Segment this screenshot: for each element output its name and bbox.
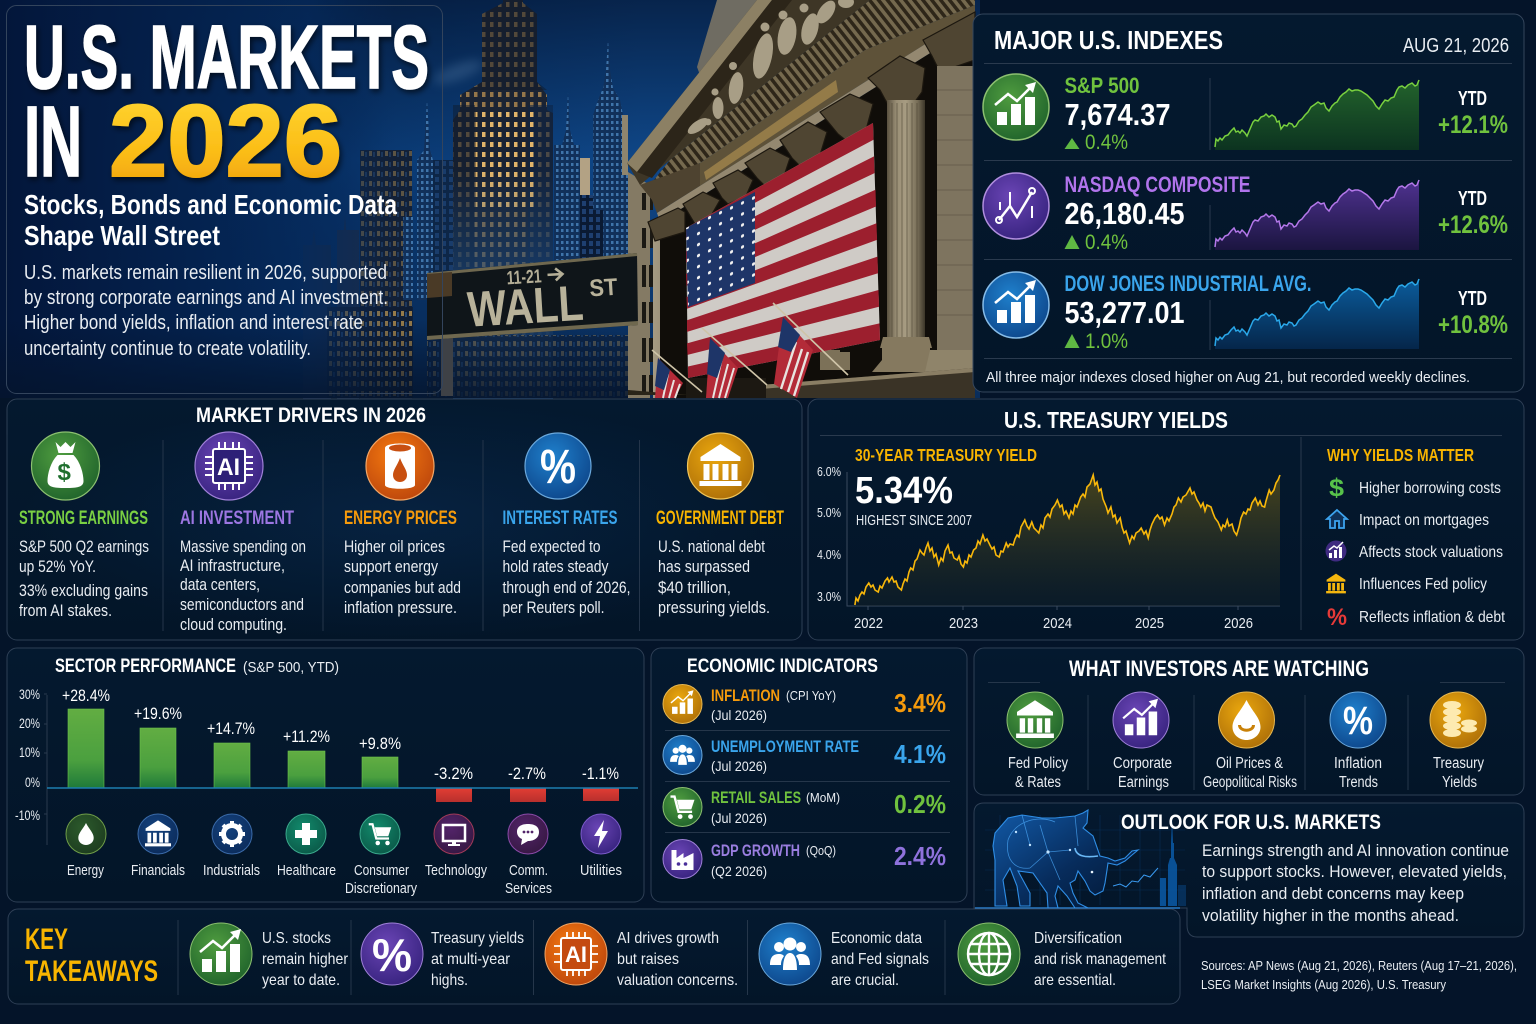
takeaway: treasury yields: at multi-year: [431, 951, 511, 968]
heading: (S&P 500, YTD): [243, 659, 339, 676]
takeaway: diversification: [958, 923, 1166, 989]
takeaway: AI growth: valuation concerns.: [617, 972, 738, 989]
takeaway: economic data: are crucial.: [831, 972, 899, 989]
indicator: unemployment rate: [663, 736, 946, 774]
icon: oil barrel: [366, 432, 434, 500]
heading: SECTOR PERFORMANCE: [55, 656, 236, 677]
icon: AI chip: [545, 923, 607, 985]
bar chart: sector returns: -1.1%: [582, 764, 619, 783]
watch item: inflation trends: Inflation: [1334, 755, 1382, 772]
sources note: LSEG Market Insights (Aug 2026), U.S. Treasury: [1201, 977, 1446, 992]
sector: healthcare: Healthcare: [277, 862, 336, 879]
sector: financials: Financials: [131, 862, 185, 879]
row: Dow Jones: +10.8%: [1438, 311, 1508, 339]
sector: consumer discretionary: Consumer: [354, 862, 409, 879]
outlook paragraph: volatility higher in the months ahead.: [1202, 906, 1459, 925]
row: NASDAQ Composite: 26,180.45: [1064, 196, 1184, 231]
icon: speech bubble: [508, 814, 548, 854]
indicator: inflation: [663, 684, 946, 724]
panel: what investors are watching: [974, 648, 1524, 795]
icon: bank: [1326, 574, 1346, 593]
row: NASDAQ Composite: NASDAQ COMPOSITE: [1064, 172, 1250, 197]
driver: AI investment: semiconductors and: [180, 596, 304, 614]
sources note: [1201, 958, 1517, 992]
icon: coin stacks: [1430, 692, 1486, 748]
driver: energy prices: companies but add: [344, 579, 461, 597]
row: S&P 500: +12.1%: [1438, 111, 1508, 139]
bar chart: sector returns: +9.8%: [359, 734, 401, 753]
icon: dollar: $: [1329, 474, 1344, 502]
driver: government debt: [656, 433, 784, 617]
driver: energy prices: [344, 432, 461, 617]
takeaway: diversification: Diversification: [1034, 930, 1122, 947]
icon: bank: [1007, 692, 1063, 748]
sector: communication services: [505, 814, 552, 897]
driver: AI investment: AI infrastructure,: [180, 557, 285, 575]
outlook paragraph: Earnings strength and AI innovation continue: [1202, 841, 1509, 860]
title: U.S. MARKETS: [24, 8, 429, 108]
bar chart: sector returns: +11.2%: [283, 727, 330, 746]
indicator: retail sales: [663, 788, 946, 826]
icon: percent: %: [1343, 699, 1373, 743]
exchange building facade: [627, 0, 975, 398]
takeaway: diversification: are essential.: [1034, 972, 1116, 989]
driver: strong earnings: up 52% YoY.: [19, 558, 96, 576]
bar chart: sector returns: 30%: [19, 687, 40, 702]
indicator: retail sales: 0.2%: [894, 789, 946, 819]
small flags: [655, 317, 813, 398]
sector: industrials: [203, 814, 260, 879]
watch item: treasury yields: Treasury: [1433, 755, 1484, 772]
icon: government building: [688, 433, 754, 499]
driver: interest rates: through end of 2026,: [502, 579, 630, 597]
heading: MAJOR U.S. INDEXES: [994, 25, 1223, 55]
watch item: oil prices: Geopolitical Risks: [1203, 774, 1297, 791]
heading: OUTLOOK FOR U.S. MARKETS: [1121, 811, 1381, 834]
icon: percent: %: [1327, 604, 1347, 631]
driver: government debt: U.S. national debt: [658, 538, 765, 556]
driver: government debt: pressuring yields.: [658, 599, 770, 617]
icon: energy drop: [66, 814, 106, 854]
sparkline: NASDAQ: [1215, 180, 1419, 250]
outlook paragraph: [1202, 841, 1509, 925]
sector: financials: [131, 814, 185, 879]
chart: 30-year yield: 30-YEAR TREASURY YIELD: [855, 445, 1037, 465]
list: why yields matter: Affects stock valuations: [1359, 544, 1503, 561]
row: S&P 500: 7,674.37: [1064, 97, 1170, 132]
heading: ECONOMIC INDICATORS: [687, 655, 878, 677]
bar chart: sector returns: 20%: [19, 716, 40, 731]
driver: interest rates: hold rates steady: [502, 558, 609, 576]
indicator: GDP growth: (QoQ): [806, 843, 836, 858]
watch item: corporate earnings: [1113, 692, 1172, 791]
title: 2026: [109, 84, 342, 198]
watch item: corporate earnings: Corporate: [1113, 755, 1172, 772]
driver: strong earnings: STRONG EARNINGS: [19, 508, 148, 529]
chart: 30-year yield: 5.0%: [817, 505, 841, 520]
watch item: oil prices: [1203, 692, 1297, 791]
chart: 30-year yield: 3.0%: [817, 589, 841, 604]
icon: AI chip: [195, 432, 263, 500]
list: why yields matter: Higher borrowing costs: [1359, 480, 1501, 497]
chart: 30-year yield: 2024: [1043, 615, 1072, 632]
indicator: GDP growth: GDP GROWTH: [711, 842, 800, 860]
panel: key takeaways: [8, 909, 1180, 1004]
icon: rising chart: [1113, 692, 1169, 748]
row: S&P 500: 0.4%: [1085, 131, 1128, 154]
chart: 30-year yield: 2022: [854, 615, 883, 632]
intro paragraph: uncertainty continue to create volatility.: [24, 338, 311, 360]
bar chart: sector returns: [15, 686, 638, 845]
icon: gear: [212, 814, 252, 854]
Wall Street sign: [427, 253, 638, 396]
Wall Street sign: 11-21: [506, 266, 543, 289]
sector: communication services: Services: [505, 880, 552, 897]
list: why yields matter: Impact on mortgages: [1359, 512, 1489, 529]
icon: stock chart: [1326, 540, 1346, 562]
title: IN: [24, 86, 82, 198]
icon: bank: [138, 814, 178, 854]
row: Dow Jones: DOW JONES INDUSTRIAL AVG.: [1064, 271, 1312, 296]
driver: AI investment: cloud computing.: [180, 616, 287, 634]
indicator: unemployment rate: (Jul 2026): [711, 758, 767, 774]
intro paragraph: [24, 262, 388, 360]
driver: strong earnings: 33% excluding gains: [19, 582, 148, 600]
watch item: corporate earnings: Earnings: [1118, 774, 1169, 791]
sector: technology: Technology: [425, 862, 487, 879]
driver: AI investment: Massive spending on: [180, 538, 306, 556]
row: S&P 500: S&P 500: [1064, 73, 1140, 98]
driver: interest rates: Fed expected to: [502, 538, 600, 556]
driver: energy prices: inflation pressure.: [344, 599, 457, 617]
indicator: GDP growth: [663, 840, 946, 879]
takeaway: stocks higher: remain higher: [262, 951, 349, 968]
sector: consumer discretionary: [345, 814, 417, 897]
sector: utilities: [580, 814, 622, 879]
chart: 30-year yield: 4.0%: [817, 547, 841, 562]
row: NASDAQ Composite: 0.4%: [1085, 231, 1128, 254]
chart: 30-year yield: HIGHEST SINCE 2007: [856, 513, 972, 529]
icon: AI chip: AI: [565, 942, 587, 967]
subtitle: Stocks, Bonds and Economic Data: [24, 189, 397, 220]
intro paragraph: Higher bond yields, inflation and interest rate: [24, 312, 363, 334]
hero image: Wall Street skyline and exchange facade: [0, 0, 980, 400]
driver: government debt: $40 trillion,: [658, 579, 731, 597]
row: NASDAQ Composite: [983, 172, 1508, 254]
icon: people: [759, 923, 821, 985]
takeaway: treasury yields: [361, 923, 524, 989]
driver: interest rates: INTEREST RATES: [502, 508, 618, 529]
watch item: Fed policy: Fed Policy: [1008, 755, 1068, 772]
icon: Dow chart: [983, 272, 1049, 338]
icon: rising chart: [190, 923, 252, 985]
driver: AI investment: [180, 432, 306, 634]
column capitals: [648, 12, 975, 241]
Wall Street sign: ST: [589, 274, 619, 302]
sector: energy: Energy: [67, 862, 104, 879]
panel: economic indicators: [651, 648, 967, 902]
bar chart: sector returns: -10%: [15, 808, 40, 823]
outlook paragraph: inflation and debt concerns may keep: [1202, 884, 1464, 903]
bar chart: sector returns: +14.7%: [207, 719, 255, 738]
indicator: GDP growth: 2.4%: [894, 841, 946, 871]
bar chart: sector returns: -3.2%: [434, 764, 473, 783]
chart: 30-year yield: 2023: [949, 615, 978, 632]
driver: government debt: has surpassed: [658, 558, 750, 576]
driver: strong earnings: [19, 432, 149, 620]
panel: market drivers: [7, 399, 802, 640]
skyline: [0, 0, 632, 400]
takeaway: stocks higher: U.S. stocks: [262, 930, 331, 947]
row: Dow Jones: 1.0%: [1085, 330, 1128, 353]
illustration: glowing bull: [975, 810, 1186, 908]
row: Dow Jones: 53,277.01: [1064, 295, 1184, 330]
icon: medical cross: [286, 814, 326, 854]
takeaway: treasury yields: Treasury yields: [431, 930, 524, 947]
list: why yields matter: WHY YIELDS MATTER: [1327, 445, 1474, 465]
row: Dow Jones: [983, 271, 1508, 353]
driver: AI investment: data centers,: [180, 576, 260, 594]
heading: KEY: [25, 923, 68, 956]
heading: WHAT INVESTORS ARE WATCHING: [1069, 656, 1369, 681]
driver: government debt: GOVERNMENT DEBT: [656, 508, 784, 529]
watch item: treasury yields: Yields: [1442, 774, 1477, 791]
takeaway: treasury yields: highs.: [431, 972, 468, 989]
icon: shopping cart: [360, 814, 400, 854]
sector: industrials: Industrials: [203, 862, 260, 879]
sector: utilities: Utilities: [580, 862, 622, 879]
watch item: treasury yields: [1430, 692, 1486, 791]
chart: 30-year yield: 5.34%: [855, 470, 953, 512]
indicator: inflation: 3.4%: [894, 688, 946, 718]
list: why yields matter: Reflects inflation & debt: [1359, 609, 1505, 626]
icon: oil drop: [1218, 692, 1274, 748]
sector: consumer discretionary: Discretionary: [345, 880, 417, 897]
driver: AI investment: AI INVESTMENT: [180, 508, 294, 529]
icon: percent: [525, 433, 591, 499]
icon: percent: %: [372, 929, 412, 981]
icon: lightning bolt: [581, 814, 621, 854]
icon: factory: [663, 840, 702, 878]
takeaway: economic data: [759, 923, 929, 989]
bar chart: sector returns: +19.6%: [134, 704, 182, 723]
panel: hero title block: [6, 6, 442, 394]
takeaway: economic data: Economic data: [831, 930, 922, 947]
panel: sector performance: [7, 648, 644, 902]
driver: energy prices: Higher oil prices: [344, 538, 445, 556]
indicator: GDP growth: (Q2 2026): [711, 863, 767, 879]
icon: AI chip: AI: [217, 454, 240, 481]
icon: money bag: $: [58, 459, 72, 486]
intro paragraph: U.S. markets remain resilient in 2026, supported: [24, 262, 387, 284]
icon: cart: [663, 788, 702, 826]
chart: 30-year yield: [817, 445, 1280, 632]
takeaway: stocks higher: year to date.: [262, 972, 340, 989]
heading: U.S. TREASURY YIELDS: [1004, 407, 1228, 433]
panel: outlook for U.S. markets: [974, 803, 1524, 937]
takeaway: AI growth: AI drives growth: [617, 930, 719, 947]
row: S&P 500: YTD: [1458, 88, 1487, 110]
sector: communication services: Comm.: [509, 862, 548, 879]
subtitle: Shape Wall Street: [24, 220, 220, 251]
icon: globe: [958, 923, 1020, 985]
Wall Street sign: WALL: [466, 275, 585, 338]
driver: strong earnings: S&P 500 Q2 earnings: [19, 538, 149, 556]
indicator: retail sales: (Jul 2026): [711, 810, 767, 826]
watch item: oil prices: Oil Prices &: [1216, 755, 1284, 772]
icon: rising chart: [663, 684, 702, 724]
indicator: retail sales: RETAIL SALES: [711, 789, 801, 807]
indicator: unemployment rate: UNEMPLOYMENT RATE: [711, 738, 859, 756]
driver: strong earnings: from AI stakes.: [19, 602, 112, 620]
list: why yields matter: [1326, 445, 1505, 631]
icon: monitor: [434, 814, 474, 854]
takeaway: AI growth: but raises: [617, 951, 679, 968]
bar chart: sector returns: +28.4%: [62, 686, 110, 705]
panel: major U.S. indexes: [973, 14, 1524, 392]
sparkline: S&P 500: [1215, 80, 1419, 150]
icon: house: [1327, 510, 1347, 528]
icon: percent: %: [540, 441, 576, 494]
columns: [887, 100, 925, 340]
indicator: inflation: (Jul 2026): [711, 707, 767, 723]
sector: technology: [425, 814, 487, 879]
heading: TAKEAWAYS: [25, 955, 158, 988]
takeaway: stocks higher: [190, 923, 349, 989]
takeaway: diversification: and risk management: [1034, 951, 1166, 968]
driver: energy prices: support energy: [344, 558, 439, 576]
sector: energy: [66, 814, 106, 879]
main American flag: [686, 123, 880, 378]
indicator: unemployment rate: 4.1%: [894, 739, 946, 769]
chart: 30-year yield: 2026: [1224, 615, 1253, 632]
chart: 30-year yield: 6.0%: [817, 464, 841, 479]
row: NASDAQ Composite: YTD: [1458, 188, 1487, 210]
driver: interest rates: [502, 433, 630, 617]
sparkline: Dow Jones: [1215, 279, 1419, 349]
list: why yields matter: Influences Fed policy: [1359, 576, 1487, 593]
driver: energy prices: ENERGY PRICES: [344, 508, 457, 529]
icon: money bag: [32, 432, 100, 500]
bar chart: sector returns: 10%: [19, 745, 40, 760]
heading: MARKET DRIVERS IN 2026: [196, 404, 426, 427]
indicator: inflation: INFLATION: [711, 687, 780, 705]
icon: S&P chart: [983, 74, 1049, 140]
takeaway: AI growth: [545, 923, 738, 989]
row: NASDAQ Composite: +12.6%: [1438, 211, 1508, 239]
bar chart: sector returns: 0%: [25, 775, 40, 790]
watch item: Fed policy: [1007, 692, 1068, 791]
icon: NASDAQ chart: [983, 173, 1049, 239]
subtitle: [24, 189, 397, 251]
watch item: Fed policy: & Rates: [1015, 774, 1061, 791]
indicator: inflation: (CPI YoY): [786, 688, 836, 703]
date: AUG 21, 2026: [1403, 35, 1509, 57]
panel: U.S. treasury yields: [808, 399, 1524, 640]
driver: interest rates: per Reuters poll.: [502, 599, 604, 617]
watch item: inflation trends: Trends: [1339, 774, 1378, 791]
heading: [25, 923, 158, 988]
intro paragraph: by strong corporate earnings and AI investment.: [24, 287, 388, 309]
title: [24, 8, 429, 198]
watch item: inflation trends: [1330, 692, 1386, 791]
footnote: All three major indexes closed higher on Aug 21, but recorded weekly declines.: [986, 369, 1470, 386]
row: Dow Jones: YTD: [1458, 288, 1487, 310]
bar chart: sector returns: -2.7%: [508, 764, 546, 783]
row: S&P 500: [983, 73, 1508, 154]
indicator: retail sales: (MoM): [806, 790, 840, 805]
sculptures on pediment: [685, 0, 854, 137]
icon: percent: [361, 923, 423, 985]
takeaway: economic data: and Fed signals: [831, 951, 929, 968]
chart: 30-year yield: 2025: [1135, 615, 1164, 632]
icon: people: [663, 736, 702, 774]
sector: healthcare: [277, 814, 336, 879]
outlook paragraph: to support stocks. However, elevated yields,: [1202, 862, 1507, 881]
